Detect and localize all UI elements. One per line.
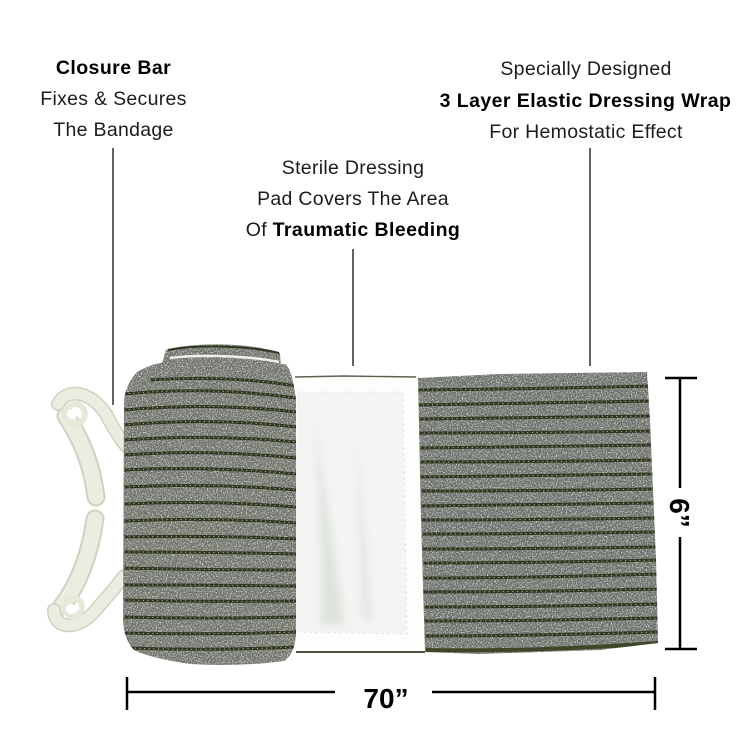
text: fixes and secures: Fixes & Secures [40,88,187,110]
text: pad covers the area: Pad Covers The Area [257,188,449,210]
lower clip [54,519,124,625]
label: 70 inches: 70” [363,683,409,714]
roll top band [160,344,281,370]
text: for hemostatic effect: For Hemostatic Effect [489,121,683,143]
text: the bandage: The Bandage [53,119,174,141]
text: specially designed: Specially Designed [500,58,672,80]
sterile white dressing pad [291,376,427,652]
roll body [123,362,296,665]
rolled bandage [123,344,296,665]
callout: closure bar [40,57,187,405]
pad inner panel [293,392,407,634]
label: 6 inches: 6” [664,498,695,528]
text: sterile dressing: Sterile Dressing [282,157,424,179]
heading: 3 layer elastic dressing wrap: 3 Layer Elastic Dressing Wrap [440,90,731,112]
wrap stripes [418,386,658,650]
heading: closure bar: Closure Bar [56,57,171,79]
icon: closure bar clips [54,394,126,625]
leader line: closure bar [112,148,114,405]
callout: elastic dressing wrap [440,58,731,366]
leader line: dressing pad [352,249,354,366]
upper clip [58,394,126,497]
text: of traumatic bleeding: Of Traumatic Bleeding [246,219,460,241]
callout: sterile dressing pad [246,157,460,366]
leader line: wrap [589,148,591,366]
elastic wrap, flat section [418,372,658,654]
wrap fabric [418,372,658,654]
roll stripes [124,378,296,649]
